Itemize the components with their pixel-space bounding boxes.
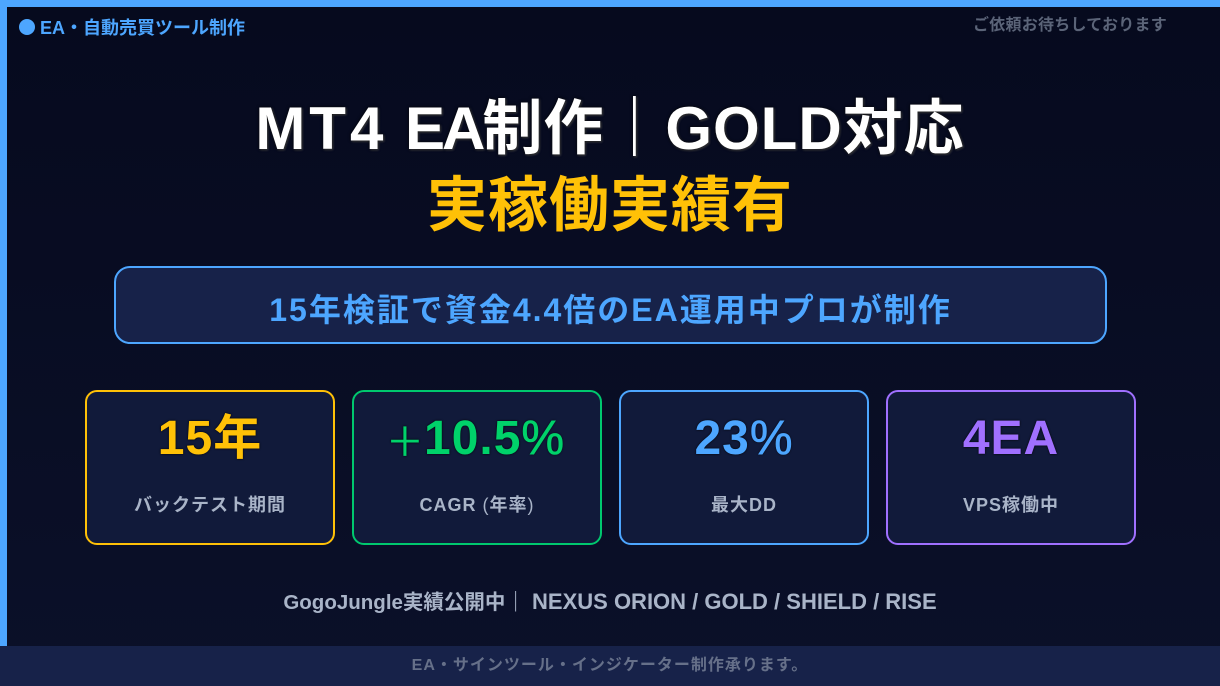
stat card: backtest period [85,390,335,545]
value: +10.5% [389,394,565,481]
highlight banner [114,266,1107,344]
title line 2: 実稼働実績有 [427,172,793,239]
footer bar [0,646,1220,686]
value: 15年 [158,412,262,465]
title line 1: MT4 EA制作｜GOLD対応 [255,95,965,162]
title [255,95,965,239]
value: 23% [694,412,794,465]
stat card: max drawdown [619,390,869,545]
label: 最大DD [711,495,777,515]
tag text: EA・自動売買ツール制作 [40,18,245,38]
stat card: VPS running [886,390,1136,545]
top-right note: ご依頼お待ちしております [973,17,1167,34]
icon: blue dot [19,19,35,35]
stat card: CAGR [352,390,602,545]
label: バックテスト期間 [134,495,286,515]
label: VPS稼働中 [963,495,1059,515]
label: CAGR (年率) [420,495,534,515]
value: 4EA [963,412,1059,465]
top accent bar [0,0,1220,7]
product list line: GogoJungle実績公開中｜ NEXUS ORION / GOLD / SHIELD / RISE [283,589,937,614]
left accent bar [0,0,7,646]
top-left tag [19,18,245,38]
banner text: 15年検証で資金4.4倍のEA運用中プロが制作 [269,292,952,328]
footer text: EA・サインツール・インジケーター制作承ります。 [412,657,808,674]
